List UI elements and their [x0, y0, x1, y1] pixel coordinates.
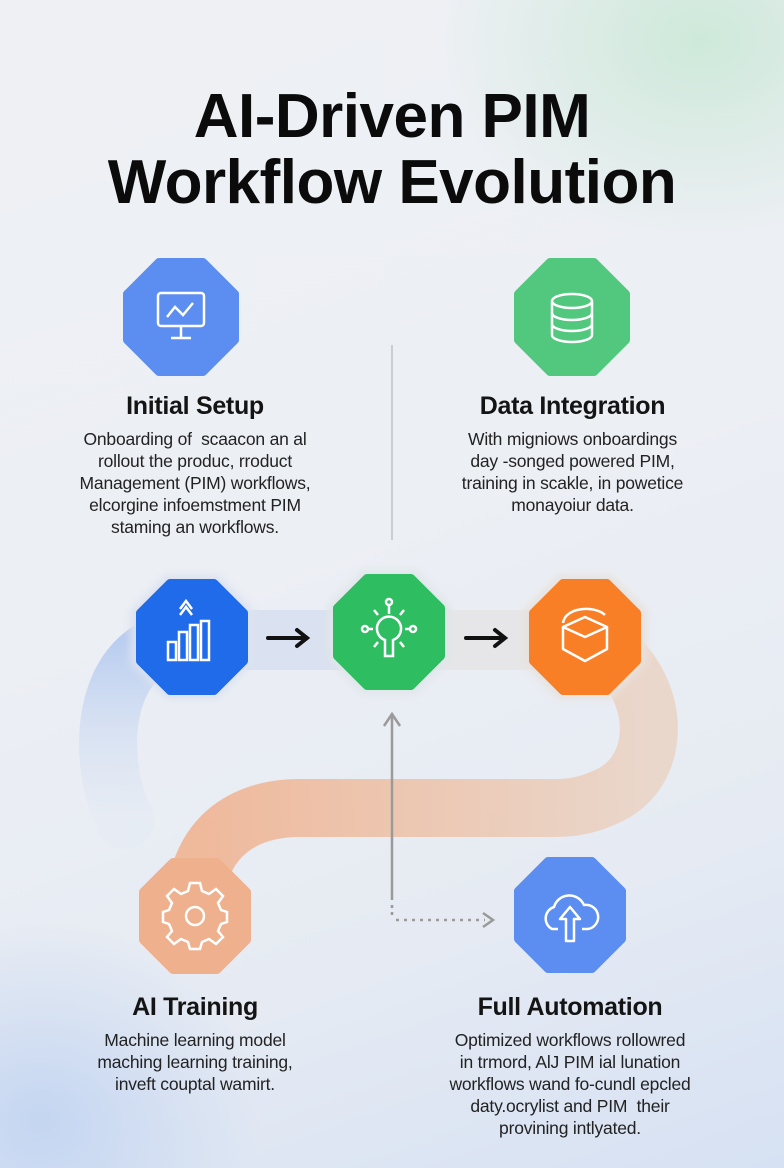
text: Full Automation body: provining intlyated. — [499, 1118, 641, 1138]
text: Data Integration body — [462, 429, 683, 515]
title: AI-Driven PIM — [194, 82, 590, 151]
text: Data Integration body: training in scakle, in powetice — [462, 473, 683, 493]
text: AI Training body — [97, 1030, 293, 1094]
pipe: top band — [180, 610, 590, 670]
heading: Initial Setup: Initial Setup — [126, 392, 264, 420]
text: Initial Setup body: Onboarding of scaacon an al — [83, 429, 307, 449]
text: Full Automation body: Optimized workflows rollowred — [455, 1030, 685, 1050]
text: Initial Setup body: staming an workflows. — [111, 517, 279, 537]
title: Workflow Evolution — [108, 148, 676, 217]
heading: Data Integration: Data Integration — [480, 392, 665, 420]
arrow: vertical gray — [384, 714, 493, 927]
heading: AI Training: AI Training — [132, 993, 258, 1021]
text: AI Training body: inveft couptal wamirt. — [115, 1074, 275, 1094]
text: Initial Setup body: rollout the produc, rroduct — [98, 451, 292, 471]
text: Initial Setup body: elcorgine infoemstment PIM — [89, 495, 301, 515]
text: Data Integration body: With migniows onboardings — [468, 429, 677, 449]
text: AI Training body: maching learning training, — [97, 1052, 293, 1072]
text: Data Integration body: monayoiur data. — [511, 495, 634, 515]
text: Full Automation body: workflows wand fo-cundl epcled — [449, 1074, 691, 1094]
title — [108, 82, 676, 217]
text: Full Automation body — [449, 1030, 691, 1138]
arrows: black — [268, 630, 505, 646]
text: Full Automation body: in trmord, AlJ PIM ial lunation — [460, 1052, 680, 1072]
pipe: blue arc — [108, 640, 180, 820]
text: Full Automation body: daty.ocrylist and PIM their — [470, 1096, 670, 1116]
heading: Full Automation: Full Automation — [478, 993, 662, 1021]
text: AI Training body: Machine learning model — [104, 1030, 286, 1050]
text: Data Integration body: day -songed powered PIM, — [470, 451, 675, 471]
text: Initial Setup body: Management (PIM) workflows, — [80, 473, 310, 493]
text: Initial Setup body — [80, 429, 310, 537]
pipe: orange — [195, 660, 649, 900]
